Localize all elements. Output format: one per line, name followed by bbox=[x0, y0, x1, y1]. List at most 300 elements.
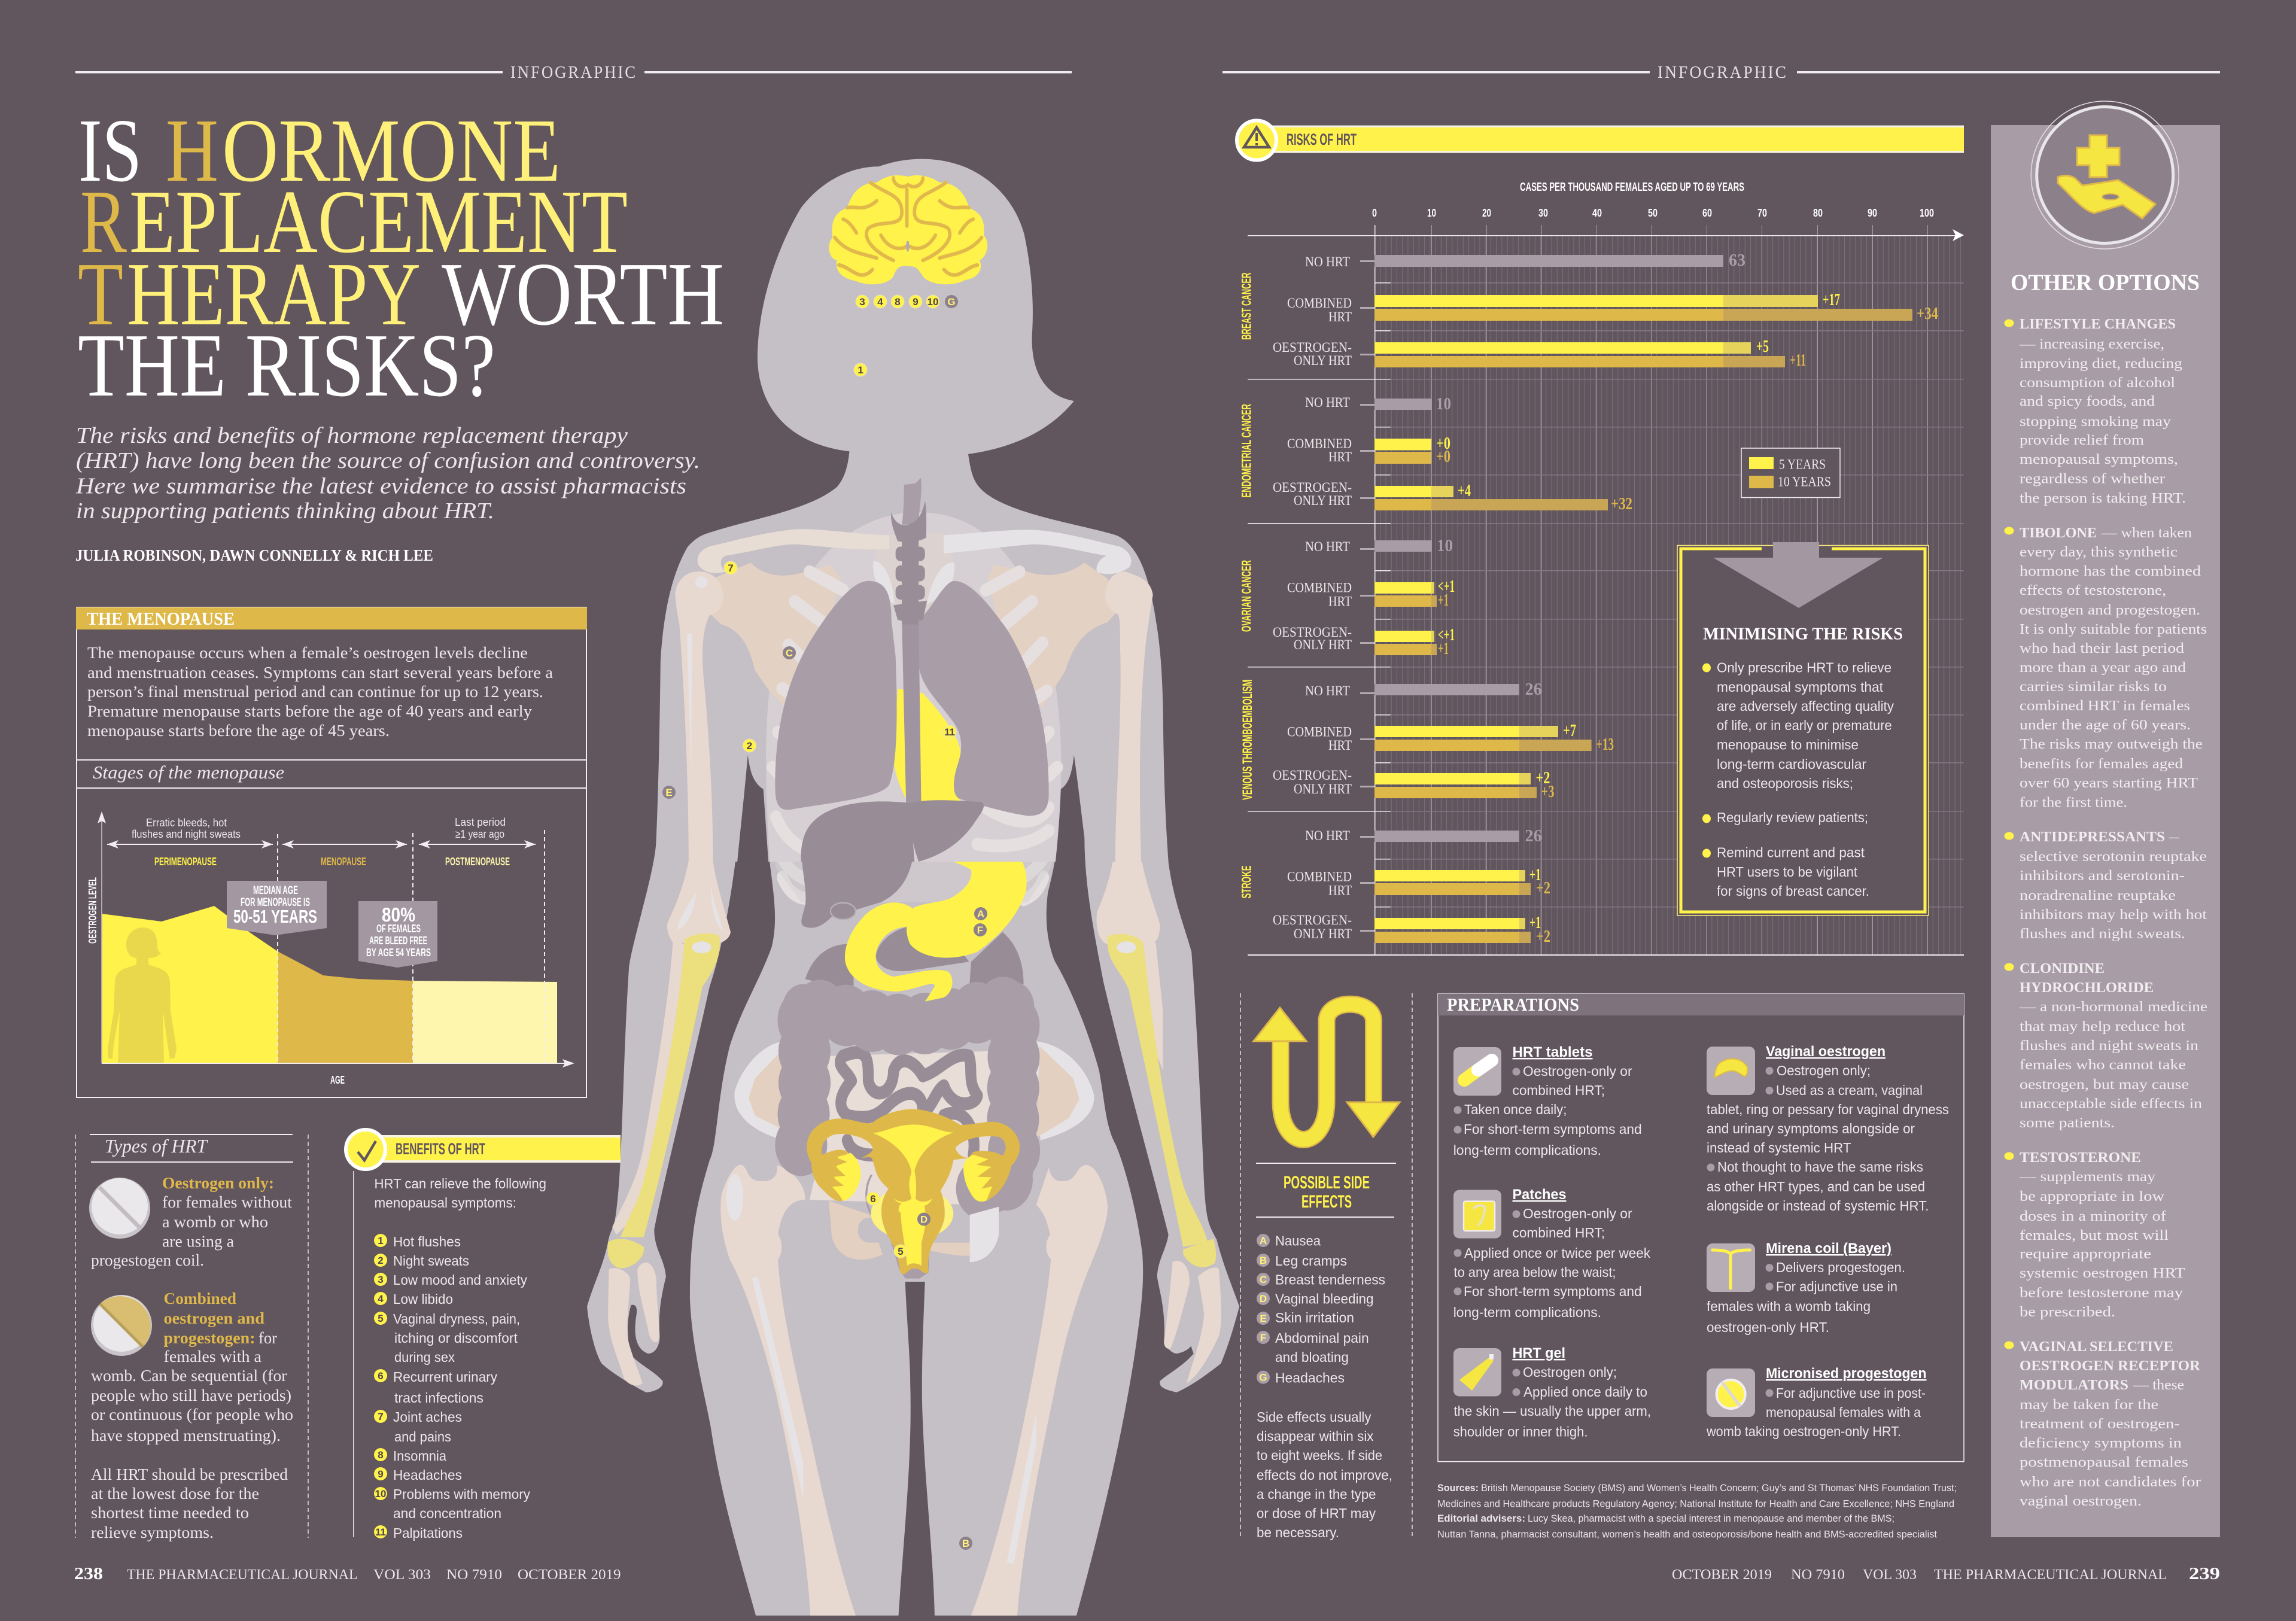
group: endometrial cancer bars: +0 bbox=[1436, 434, 1450, 453]
axis numbers: 10 bbox=[1427, 207, 1436, 219]
heart bbox=[893, 689, 965, 805]
left page footer: OCTOBER 2019 bbox=[518, 1567, 621, 1583]
numbered symptom list: 6 bbox=[378, 1370, 384, 1382]
sources and advisers: Sources: bbox=[1437, 1482, 1479, 1494]
item: Mirena coil: For adjunctive use in bbox=[1776, 1279, 1897, 1294]
option: vaginal selective oestrogen receptor modulators: OESTROGEN RECEPTOR bbox=[2020, 1358, 2201, 1374]
panel: possible side effects bbox=[1240, 993, 1412, 1540]
right page header: infographic rule: INFOGRAPHIC bbox=[1658, 63, 1788, 82]
option: tibolone: hormone has the combined bbox=[2020, 564, 2201, 579]
icon: down arrow bbox=[1713, 542, 1883, 608]
body upper half: head, chest and lungs bbox=[655, 159, 1169, 862]
shoulder blades bbox=[707, 562, 841, 707]
option: vaginal selective oestrogen receptor modulators: VAGINAL SELECTIVE bbox=[2020, 1339, 2173, 1355]
axis numbers: 70 bbox=[1757, 207, 1767, 219]
numbered symptom list: Recurrent urinary bbox=[393, 1369, 497, 1385]
liver upper bbox=[801, 801, 914, 862]
callout: 80 percent: ARE BLEED FREE bbox=[369, 935, 427, 947]
axis numbers: 100 bbox=[1920, 207, 1934, 219]
femurs bbox=[720, 1165, 856, 1616]
major grid lines bbox=[1374, 225, 1928, 955]
option: lifestyle changes: the person is taking HRT. bbox=[2020, 491, 2186, 506]
option: antidepressants: — bbox=[2169, 829, 2180, 845]
icon: patch bbox=[1453, 1190, 1501, 1239]
option: antidepressants: inhibitors and serotonin- bbox=[2020, 868, 2185, 884]
callout: 80 percent: OF FEMALES bbox=[376, 923, 421, 935]
item: micronised progestogen: Micronised progestogen bbox=[1766, 1365, 1927, 1382]
group: stroke bars: +2 bbox=[1536, 927, 1550, 946]
icon: combined tablet bbox=[91, 1295, 152, 1356]
group: venous thromboembolism bars: +13 bbox=[1596, 735, 1614, 754]
option: clonidine hydrochloride: females who cannot take bbox=[2020, 1057, 2186, 1073]
axis numbers bbox=[1372, 207, 1934, 219]
numbered symptom list: tract infections bbox=[394, 1390, 483, 1406]
right page footer: NO 7910 bbox=[1791, 1567, 1845, 1583]
group: stroke bars: HRT bbox=[1328, 883, 1352, 898]
item: vaginal oestrogen: Vaginal oestrogen bbox=[1766, 1044, 1886, 1060]
option: clonidine hydrochloride: unacceptable side effects in bbox=[2020, 1096, 2202, 1112]
item: HRT tablets: Oestrogen-only or bbox=[1523, 1063, 1632, 1079]
numbered symptom list: Insomnia bbox=[393, 1448, 446, 1464]
option: lifestyle changes: LIFESTYLE CHANGES bbox=[2020, 317, 2176, 332]
dose note: at the lowest dose for the bbox=[91, 1485, 259, 1503]
sources and advisers: Editorial advisers: bbox=[1437, 1513, 1525, 1524]
option: lifestyle changes: improving diet, reducing bbox=[2020, 356, 2182, 372]
minimising bullet list: HRT users to be vigilant bbox=[1717, 864, 1858, 880]
right page footer: OCTOBER 2019 bbox=[1672, 1567, 1772, 1583]
lettered side effect list: Abdominal pain bbox=[1275, 1330, 1369, 1346]
authors: JULIA ROBINSON, DAWN CONNELLY & RICH LEE bbox=[75, 546, 433, 564]
body lower half: skeleton and organs bbox=[587, 838, 1239, 1616]
group: endometrial cancer bars: ONLY HRT bbox=[1294, 493, 1352, 508]
sources and advisers bbox=[1437, 1482, 1957, 1540]
numbered symptom and side-effect markers: 11 bbox=[944, 726, 955, 738]
lettered side effect list: Vaginal bleeding bbox=[1275, 1291, 1374, 1307]
group: endometrial cancer bars: COMBINED bbox=[1287, 436, 1352, 451]
group: ovarian cancer bars: +1 bbox=[1438, 591, 1449, 610]
option: tibolone: more than a year ago and bbox=[2020, 660, 2186, 676]
benefits intro: HRT can relieve the following bbox=[375, 1176, 546, 1191]
group: endometrial cancer bars: +0 bbox=[1436, 447, 1450, 466]
liver lower bbox=[801, 838, 914, 928]
option: vaginal selective oestrogen receptor modulators: treatment of oestrogen- bbox=[2020, 1416, 2180, 1432]
group: stroke bars: OESTROGEN- bbox=[1273, 913, 1352, 927]
group: venous thromboembolism bars: HRT bbox=[1328, 738, 1352, 753]
option: lifestyle changes: regardless of whether bbox=[2020, 472, 2165, 487]
item: vaginal oestrogen: Used as a cream, vaginal bbox=[1776, 1082, 1923, 1098]
right page footer: THE PHARMACEUTICAL JOURNAL bbox=[1934, 1567, 2167, 1583]
option: vaginal selective oestrogen receptor modulators: who are not candidates for bbox=[2020, 1474, 2201, 1490]
item: Mirena coil: oestrogen-only HRT. bbox=[1707, 1319, 1829, 1335]
minimising bullet list: Regularly review patients; bbox=[1717, 810, 1868, 825]
option: lifestyle changes: and spicy foods, and bbox=[2020, 394, 2155, 409]
legend bbox=[1741, 448, 1840, 498]
menopause description: The menopause occurs when a female’s oestrogen levels decline bbox=[87, 644, 528, 662]
item: HRT tablets bbox=[1453, 1044, 1642, 1158]
numbered symptom and side-effect markers: 7 bbox=[728, 562, 734, 574]
preparations heading: PREPARATIONS bbox=[1447, 994, 1579, 1015]
group: ovarian cancer bars: ONLY HRT bbox=[1294, 637, 1352, 652]
left page footer bbox=[74, 1565, 621, 1583]
option: testosterone: TESTOSTERONE bbox=[2020, 1150, 2141, 1166]
option: lifestyle changes: menopausal symptoms, bbox=[2020, 452, 2178, 467]
group: breast cancer bars: +5 bbox=[1756, 337, 1769, 356]
group: ovarian cancer bars: <+1 bbox=[1438, 577, 1455, 596]
benefits intro: menopausal symptoms: bbox=[375, 1195, 516, 1211]
title: IS bbox=[78, 100, 142, 200]
group: ovarian cancer bars: <+1 bbox=[1438, 625, 1455, 644]
icon: warning triangle bbox=[1237, 121, 1276, 160]
option: tibolone: oestrogen and progestogen. bbox=[2020, 603, 2200, 618]
standfirst text: The risks and benefits of hormone replacement therapy bbox=[76, 423, 628, 448]
option: antidepressants: noradrenaline reuptake bbox=[2020, 888, 2176, 904]
group: breast cancer bars: ONLY HRT bbox=[1294, 353, 1352, 368]
item: vaginal oestrogen bbox=[1707, 1044, 1949, 1214]
pelvic cavity bbox=[810, 1051, 995, 1205]
combined text: have stopped menstruating). bbox=[91, 1427, 281, 1444]
group: breast cancer bars: +11 bbox=[1790, 351, 1806, 370]
item: patches bbox=[1453, 1187, 1650, 1320]
menopause description: menopause starts before the age of 45 years. bbox=[87, 722, 390, 740]
side effects note: Side effects usually bbox=[1257, 1409, 1371, 1425]
panel: other options bbox=[1991, 101, 2220, 1537]
option: testosterone: be prescribed. bbox=[2020, 1304, 2115, 1320]
right page header: infographic rule bbox=[1222, 63, 2220, 82]
panel: minimising the risks bbox=[1677, 542, 1929, 916]
item: patches: Applied once or twice per week bbox=[1464, 1245, 1650, 1261]
group: venous thromboembolism bars: +3 bbox=[1541, 782, 1555, 801]
axis labels: OESTROGEN LEVEL bbox=[87, 877, 99, 944]
dose note: shortest time needed to bbox=[91, 1504, 249, 1522]
item: micronised progestogen bbox=[1706, 1365, 1927, 1439]
group: venous thromboembolism bars: COMBINED bbox=[1287, 725, 1352, 740]
item: patches: Oestrogen-only or bbox=[1523, 1206, 1632, 1221]
numbered symptom list: during sex bbox=[394, 1349, 455, 1365]
group: venous thromboembolism bars: NO HRT bbox=[1305, 683, 1350, 698]
stages area chart: POSTMENOPAUSE bbox=[445, 856, 510, 868]
numbered symptom and side-effect markers: B bbox=[962, 1538, 969, 1549]
stomach bbox=[907, 844, 1027, 958]
group: ovarian cancer bars: HRT bbox=[1328, 594, 1352, 609]
left page footer: VOL 303 bbox=[373, 1567, 431, 1583]
item: HRT gel bbox=[1453, 1345, 1651, 1440]
left forearm bones bbox=[667, 838, 731, 943]
group: breast cancer bars: 63 bbox=[1729, 251, 1745, 270]
numbered symptom list: 5 bbox=[378, 1313, 384, 1324]
menopause description bbox=[87, 644, 553, 740]
option: lifestyle changes: — increasing exercise, bbox=[2019, 336, 2164, 352]
numbered symptom list: 4 bbox=[378, 1293, 384, 1304]
dose note bbox=[91, 1465, 288, 1541]
callout: median age: MEDIAN AGE bbox=[253, 884, 298, 897]
option: testosterone: systemic oestrogen HRT bbox=[2020, 1266, 2185, 1281]
side effects note: a change in the type bbox=[1257, 1486, 1376, 1502]
lettered side effect list: Breast tenderness bbox=[1275, 1272, 1385, 1288]
option: tibolone bbox=[2020, 525, 2207, 811]
stages heading: Stages of the menopause bbox=[93, 762, 284, 783]
title: R bbox=[80, 171, 127, 272]
category labels: STROKE bbox=[1239, 865, 1254, 899]
group: endometrial cancer bars: 10 bbox=[1436, 394, 1451, 413]
option: testosterone: females, but most will bbox=[2020, 1228, 2169, 1243]
item: HRT gel: HRT gel bbox=[1513, 1345, 1565, 1361]
standfirst text bbox=[75, 423, 700, 524]
panel heading: THE MENOPAUSE bbox=[87, 608, 235, 629]
axis numbers: 20 bbox=[1482, 207, 1491, 219]
option: clonidine hydrochloride: flushes and night sweats in bbox=[2020, 1038, 2198, 1054]
legend: 5 YEARS bbox=[1779, 457, 1826, 472]
group: venous thromboembolism bars: OESTROGEN- bbox=[1273, 768, 1352, 783]
title: T bbox=[78, 244, 123, 344]
title: WORTH bbox=[442, 244, 724, 344]
standfirst text: in supporting patients thinking about HRT. bbox=[76, 498, 494, 524]
numbered symptom list: Low mood and anxiety bbox=[393, 1272, 527, 1288]
rib cage bbox=[766, 512, 1061, 862]
benefits banner: BENEFITS OF HRT bbox=[396, 1140, 485, 1158]
numbered symptom and side-effect markers: 9 bbox=[913, 296, 919, 308]
title: THE RISKS? bbox=[78, 315, 495, 415]
minimising bullet list: for signs of breast cancer. bbox=[1717, 883, 1869, 899]
lettered side effect list: Leg cramps bbox=[1275, 1253, 1347, 1269]
numbered symptom list: and pains bbox=[394, 1429, 451, 1444]
lettered side effect list: C bbox=[1260, 1274, 1267, 1285]
option: tibolone: for the first time. bbox=[2020, 795, 2127, 811]
axis numbers: 90 bbox=[1868, 207, 1877, 219]
group: stroke bars: COMBINED bbox=[1287, 869, 1352, 884]
option: tibolone: combined HRT in females bbox=[2020, 698, 2190, 714]
option: clonidine hydrochloride: — a non-hormonal medicine bbox=[2019, 999, 2207, 1015]
stages area chart: MENOPAUSE bbox=[321, 856, 366, 868]
option: antidepressants bbox=[2020, 829, 2207, 942]
group: endometrial cancer bars: +4 bbox=[1458, 481, 1471, 500]
numbered symptom and side-effect markers: D bbox=[920, 1214, 927, 1225]
right page footer: 239 bbox=[2189, 1565, 2220, 1583]
numbered symptom list: 1 bbox=[378, 1235, 384, 1246]
option: testosterone: be appropriate in low bbox=[2020, 1189, 2165, 1205]
option: clonidine hydrochloride: some patients. bbox=[2020, 1115, 2115, 1131]
numbered symptom list: Night sweats bbox=[393, 1253, 469, 1269]
callout: median age bbox=[227, 881, 327, 935]
group: breast cancer bars: HRT bbox=[1328, 309, 1352, 324]
option: antidepressants: selective serotonin reuptake bbox=[2020, 849, 2207, 865]
lungs bbox=[775, 581, 897, 810]
item: micronised progestogen: menopausal females with a bbox=[1766, 1404, 1921, 1420]
minimising bullet list: and osteoporosis risks; bbox=[1717, 775, 1853, 791]
item: HRT tablets: long-term complications. bbox=[1453, 1142, 1601, 1158]
panel: preparations bbox=[1438, 994, 1964, 1462]
item: HRT tablets: combined HRT; bbox=[1513, 1082, 1605, 1098]
minimising bullet list: long-term cardiovascular bbox=[1717, 756, 1866, 772]
left page footer: 238 bbox=[74, 1565, 103, 1583]
axis numbers: 30 bbox=[1538, 207, 1548, 219]
group: endometrial cancer bars: OESTROGEN- bbox=[1273, 480, 1352, 495]
lettered side effect list: D bbox=[1260, 1293, 1267, 1304]
item: Mirena coil: Mirena coil (Bayer) bbox=[1766, 1240, 1891, 1257]
option: lifestyle changes bbox=[2019, 317, 2186, 506]
lettered side effect list: E bbox=[1260, 1313, 1267, 1324]
uterus and ovaries bbox=[807, 1109, 1020, 1279]
minimising bullet list: Remind current and past bbox=[1717, 845, 1865, 860]
other options bullets bbox=[2005, 320, 2014, 1349]
icon: tablet bbox=[1707, 1368, 1755, 1417]
numbered symptom and side-effect markers: 3 bbox=[859, 296, 865, 308]
numbered symptom and side-effect markers: 4 bbox=[877, 296, 883, 308]
callout: 80 percent bbox=[358, 901, 437, 968]
title: ORMONE bbox=[222, 100, 561, 200]
category labels: OVARIAN CANCER bbox=[1239, 560, 1254, 632]
numbered symptom list: 10 bbox=[375, 1488, 386, 1500]
option: tibolone: every day, this synthetic bbox=[2020, 545, 2178, 560]
oestrogen-only text: a womb or who bbox=[162, 1213, 268, 1231]
group: ovarian cancer bars: OESTROGEN- bbox=[1273, 625, 1352, 640]
option: testosterone: doses in a minority of bbox=[2020, 1209, 2166, 1224]
lettered side effect list: Nausea bbox=[1275, 1233, 1321, 1249]
combined text bbox=[91, 1289, 293, 1444]
other options heading: OTHER OPTIONS bbox=[2011, 270, 2200, 296]
numbered symptom and side-effect markers bbox=[662, 295, 987, 1550]
icon: white tablet bbox=[89, 1178, 150, 1239]
option: vaginal selective oestrogen receptor modulators: MODULATORS bbox=[2020, 1377, 2128, 1393]
minimising bullet list: are adversely affecting quality bbox=[1717, 698, 1894, 714]
side effects note: to eight weeks. If side bbox=[1257, 1447, 1382, 1463]
group: breast cancer bars: NO HRT bbox=[1305, 254, 1350, 269]
group: breast cancer bars: +34 bbox=[1917, 304, 1938, 323]
row label ticks bbox=[1360, 260, 1374, 932]
minimising bullet list: menopause to minimise bbox=[1717, 737, 1859, 753]
callout: median age: 50-51 YEARS bbox=[233, 906, 317, 927]
stages area chart: AGE bbox=[330, 1074, 345, 1086]
menopause description: and menstruation ceases. Symptoms can start several years before a bbox=[87, 664, 553, 682]
icon: hand holding cross bbox=[2031, 101, 2179, 249]
group: venous thromboembolism bars: 26 bbox=[1525, 680, 1542, 699]
option: testosterone: — supplements may bbox=[2019, 1169, 2155, 1185]
option: tibolone: effects of testosterone, bbox=[2020, 583, 2166, 598]
category labels: ENDOMETRIAL CANCER bbox=[1239, 404, 1254, 498]
item: patches: For short-term symptoms and bbox=[1464, 1284, 1642, 1299]
callout: 80 percent: BY AGE 54 YEARS bbox=[366, 947, 431, 959]
lettered side effect list: F bbox=[1260, 1332, 1266, 1343]
brain bbox=[829, 175, 987, 284]
side effects note: or dose of HRT may bbox=[1257, 1506, 1376, 1521]
item: patches: combined HRT; bbox=[1513, 1225, 1605, 1240]
woman silhouette bbox=[108, 927, 177, 1063]
stages area chart bbox=[87, 811, 574, 1086]
left page header: infographic rule bbox=[75, 63, 1072, 82]
group: ovarian cancer bars: +1 bbox=[1438, 639, 1449, 658]
right forearm bones bbox=[1096, 838, 1160, 944]
sources and advisers: British Menopause Society (BMS) and Women’s Health Concern; Guy’s and St Thomas’ NHS Foundation Trust; bbox=[1481, 1482, 1957, 1494]
icon: check mark bbox=[346, 1130, 385, 1169]
option: vaginal selective oestrogen receptor modulators: postmenopausal females bbox=[2020, 1455, 2188, 1470]
icon: cream blob bbox=[1707, 1047, 1755, 1095]
axis numbers: 50 bbox=[1648, 207, 1658, 219]
numbered symptom and side-effect markers: 5 bbox=[898, 1246, 904, 1257]
icon: intrauterine coil bbox=[1707, 1243, 1755, 1292]
side effects note: be necessary. bbox=[1257, 1525, 1339, 1540]
lettered side effect list: G bbox=[1259, 1372, 1267, 1383]
oestrogen-only text: progestogen coil. bbox=[91, 1251, 204, 1269]
legend: 10 YEARS bbox=[1778, 475, 1831, 489]
right page footer: VOL 303 bbox=[1863, 1567, 1917, 1583]
pelvis wings bbox=[734, 1041, 793, 1138]
stages area chart: flushes and night sweats bbox=[132, 828, 241, 840]
lettered side effect list: Skin irritation bbox=[1275, 1310, 1354, 1325]
item: vaginal oestrogen: as other HRT types, and can be used bbox=[1707, 1179, 1925, 1194]
group: stroke bars: NO HRT bbox=[1305, 828, 1350, 843]
group: endometrial cancer bars: NO HRT bbox=[1305, 395, 1350, 410]
axis numbers: 80 bbox=[1813, 207, 1823, 219]
option: antidepressants: inhibitors may help with hot bbox=[2020, 907, 2207, 923]
risks banner bbox=[1237, 121, 1964, 160]
stage names: PERIMENOPAUSE bbox=[154, 856, 217, 868]
option: clonidine hydrochloride: HYDROCHLORIDE bbox=[2020, 980, 2154, 996]
numbered symptom list: Palpitations bbox=[393, 1525, 463, 1541]
item: micronised progestogen: For adjunctive use in post- bbox=[1776, 1385, 1926, 1401]
combined text: females with a bbox=[164, 1348, 261, 1365]
category labels bbox=[1239, 272, 1255, 899]
title bbox=[78, 100, 724, 415]
menopause description: person’s final menstrual period and can continue for up to 12 years. bbox=[87, 683, 543, 701]
numbered symptom list: Problems with memory bbox=[393, 1486, 530, 1502]
option: antidepressants: ANTIDEPRESSANTS bbox=[2020, 829, 2165, 845]
oestrogen-only text bbox=[91, 1174, 292, 1269]
item: HRT tablets: HRT tablets bbox=[1513, 1044, 1593, 1060]
item: HRT gel: shoulder or inner thigh. bbox=[1453, 1424, 1588, 1440]
benefits banner bbox=[377, 1135, 621, 1163]
numbered symptom and side-effect markers: 1 bbox=[857, 364, 863, 376]
row grid lines bbox=[1374, 282, 1964, 907]
side effects heading: POSSIBLE SIDE bbox=[1284, 1173, 1370, 1193]
lettered side effect list: A bbox=[1260, 1235, 1267, 1246]
group: endometrial cancer bars: +32 bbox=[1611, 494, 1632, 513]
group: stroke bars: ONLY HRT bbox=[1294, 926, 1352, 941]
callout: median age: FOR MENOPAUSE IS bbox=[241, 896, 310, 909]
option: testosterone: before testosterone may bbox=[2020, 1285, 2183, 1301]
numbered symptom list bbox=[374, 1234, 530, 1541]
combined text: progestogen: bbox=[164, 1329, 255, 1347]
numbered symptom list: 9 bbox=[378, 1468, 384, 1480]
combined text: oestrogen and bbox=[164, 1309, 264, 1327]
option: tibolone: who had their last period bbox=[2020, 641, 2184, 656]
option: clonidine hydrochloride: oestrogen, but may cause bbox=[2020, 1077, 2189, 1093]
option: vaginal selective oestrogen receptor modulators: vaginal oestrogen. bbox=[2020, 1494, 2142, 1509]
item: vaginal oestrogen: Oestrogen only; bbox=[1777, 1063, 1871, 1078]
sternum bbox=[873, 533, 954, 611]
option: antidepressants: flushes and night sweats. bbox=[2020, 926, 2185, 942]
numbered symptom list: 2 bbox=[378, 1255, 384, 1266]
option: lifestyle changes: stopping smoking may bbox=[2020, 414, 2171, 430]
option: tibolone: The risks may outweigh the bbox=[2020, 737, 2203, 752]
item: HRT tablets: For short-term symptoms and bbox=[1464, 1121, 1642, 1137]
numbered symptom list: Joint aches bbox=[393, 1409, 462, 1425]
group: venous thromboembolism bars: +2 bbox=[1535, 768, 1550, 787]
item: vaginal oestrogen: Not thought to have the same risks bbox=[1717, 1159, 1923, 1175]
oestrogen-only text: are using a bbox=[162, 1233, 234, 1251]
category labels: VENOUS THROMBOEMBOLISM bbox=[1240, 679, 1255, 800]
title: EPLACEMENT bbox=[129, 171, 628, 272]
oestrogen-only text: Oestrogen only: bbox=[162, 1174, 274, 1192]
panel: types of HRT bbox=[75, 1134, 308, 1541]
numbered symptom list: itching or discomfort bbox=[394, 1330, 518, 1346]
combined text: or continuous (for people who bbox=[91, 1406, 293, 1424]
icon: gel tube bbox=[1453, 1348, 1501, 1397]
numbered symptom and side-effect markers: F bbox=[977, 924, 983, 936]
numbered symptom list: 7 bbox=[378, 1411, 384, 1422]
stages area chart: ≥1 year ago bbox=[455, 828, 504, 840]
option: clonidine hydrochloride: CLONIDINE bbox=[2020, 961, 2105, 977]
group: endometrial cancer bars bbox=[1273, 394, 1632, 513]
option: testosterone: require appropriate bbox=[2020, 1246, 2151, 1262]
